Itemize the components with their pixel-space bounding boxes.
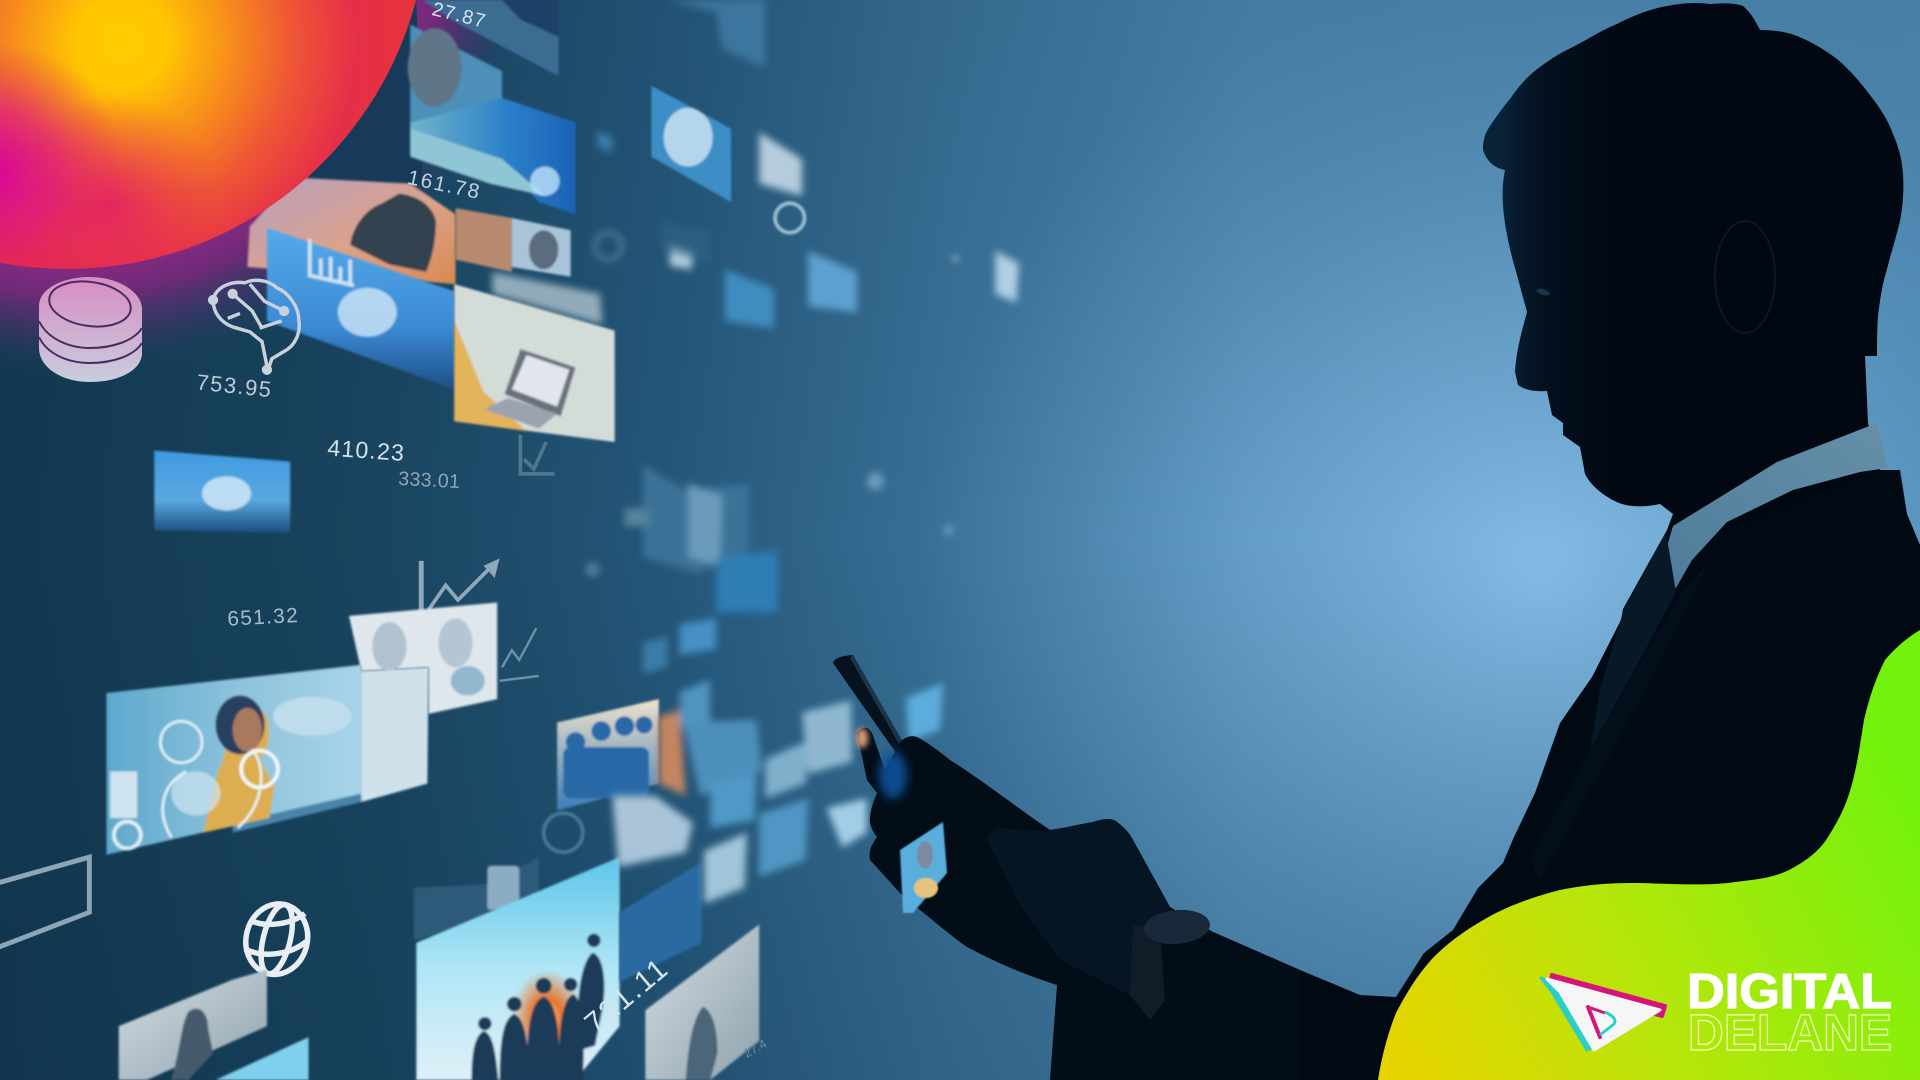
phone	[833, 655, 943, 818]
person silhouette	[1052, 3, 1920, 1080]
icon: database coins	[39, 277, 142, 382]
photo: woman with interface	[107, 665, 429, 855]
interface rings	[160, 721, 202, 763]
blurred thumbnails right of team	[612, 680, 943, 904]
text: tiny reading: 27.4	[741, 1036, 769, 1061]
photo: laptop on desk	[454, 284, 615, 442]
icon: ring	[775, 203, 804, 233]
wordmark: DIGITAL: DIGITAL	[1687, 965, 1892, 1019]
wordmark: DELANE: DELANE	[1688, 1004, 1892, 1061]
icon: circuit brain	[210, 280, 299, 373]
text: 753.95: 753.95	[195, 369, 274, 402]
photo: head hologram	[408, 24, 502, 165]
purple glow below the circle	[0, 0, 537, 378]
photo: tv wall	[414, 857, 539, 940]
cloud panel	[361, 667, 429, 802]
eye glint	[1535, 287, 1551, 297]
wristwatch	[1130, 907, 1211, 1020]
neck and head	[1483, 3, 1903, 540]
shirt collar	[1665, 423, 1887, 593]
text: 651.32: 651.32	[227, 604, 300, 631]
finger blue reflection	[879, 751, 907, 799]
text: 161.78: 161.78	[405, 166, 483, 204]
floating tile over hand	[900, 822, 947, 913]
brain glyph	[338, 288, 397, 337]
photo: light beams	[410, 98, 576, 214]
left hand and arm	[857, 728, 1300, 1080]
body and jacket	[1052, 440, 1920, 1080]
hand holding phone	[856, 728, 1300, 1080]
ear outline	[1715, 221, 1775, 333]
logo icon: play arrow	[1541, 975, 1665, 1050]
orange gradient circle	[0, 0, 430, 280]
dark gap behind panels	[306, 0, 422, 184]
silhouettes of people	[471, 934, 604, 1080]
photo: blue deep panel	[620, 862, 702, 982]
right hand highlight	[987, 819, 1170, 1000]
photo: brain over city	[267, 228, 454, 389]
inner magenta mark	[1588, 1007, 1600, 1037]
photo: globe tile	[651, 86, 731, 202]
icon: line chart	[500, 628, 539, 681]
magenta offset	[1550, 975, 1665, 1016]
text: 410.23: 410.23	[327, 435, 406, 466]
photo: sunset portraits	[456, 208, 571, 277]
blurred cluster	[585, 465, 954, 673]
white body	[1547, 979, 1660, 1050]
text: 333.01: 333.01	[398, 468, 461, 493]
necktie	[1590, 532, 1676, 750]
photo: blurred back panel	[492, 272, 602, 324]
logo: Digital Delane	[1541, 965, 1892, 1061]
fingertip glow	[856, 728, 868, 748]
floating media wall	[0, 0, 1019, 1080]
blurred tile near hand	[827, 798, 867, 847]
icon: dim line chart	[520, 435, 555, 474]
photo: grey silhouette two	[645, 924, 759, 1080]
icon: globe	[238, 897, 315, 981]
photo: cyan corner	[216, 1037, 309, 1080]
icon: outline screen	[0, 857, 89, 949]
woman figure	[203, 704, 274, 833]
photo: masked doctors	[349, 602, 497, 714]
cyan offset	[1541, 978, 1591, 1050]
text: 721.11: 721.11	[578, 951, 675, 1040]
green blob	[1378, 630, 1920, 1080]
photo: team in blue	[557, 699, 659, 811]
photo: small brain city	[154, 451, 290, 533]
photo: team at sunrise	[416, 857, 620, 1080]
inner magenta top	[1588, 1007, 1605, 1013]
photo: top strip	[422, 0, 558, 76]
icon: head outline	[544, 813, 583, 852]
upper blurred thumbnails	[595, 0, 1019, 328]
photo: man at sunset	[247, 178, 456, 284]
bar chart glyph	[310, 239, 354, 285]
photo: grey silhouette	[119, 970, 267, 1080]
icon: growth chart	[421, 558, 500, 616]
jacket lapel shadow	[1530, 560, 1710, 880]
inner cyan mark	[1600, 1012, 1615, 1035]
